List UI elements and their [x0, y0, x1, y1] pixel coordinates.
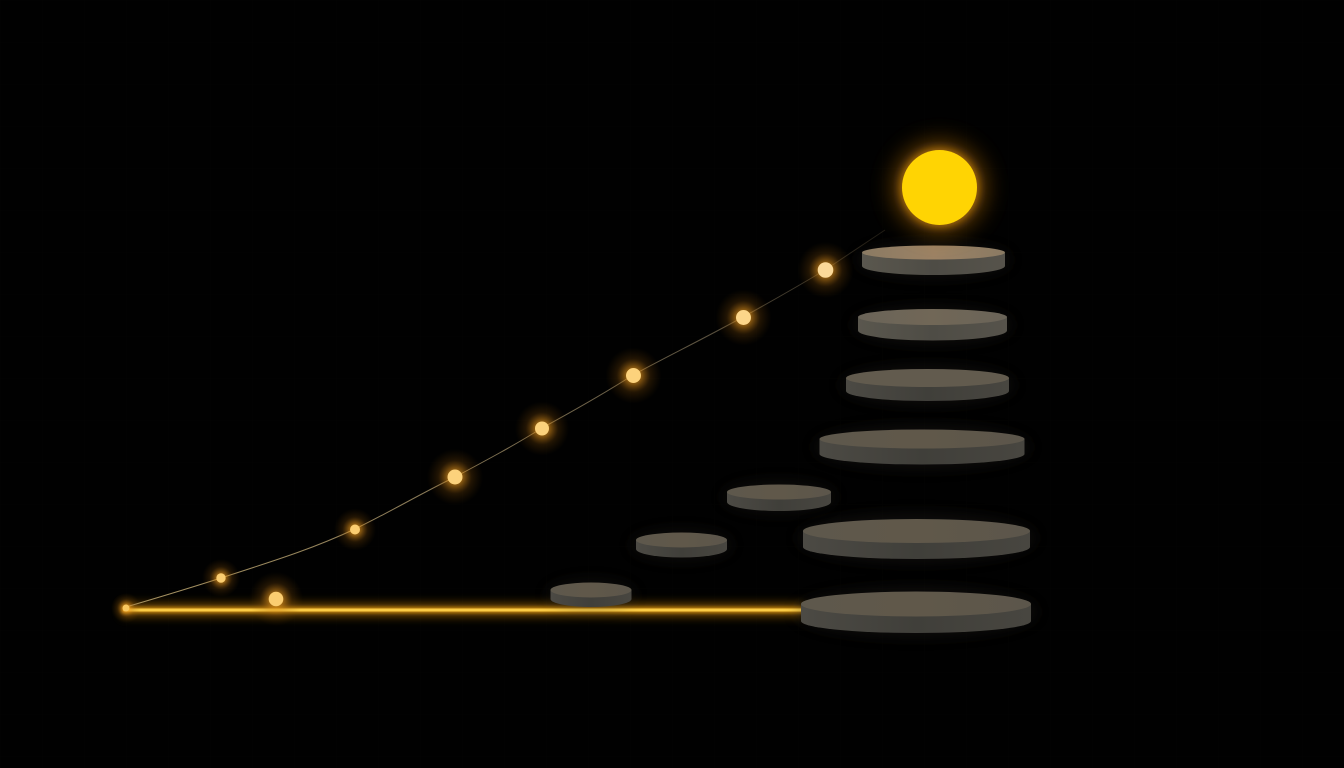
dot: origin	[111, 593, 141, 623]
horizontal baseline	[122, 604, 804, 616]
disc: small 3	[723, 481, 835, 513]
disc: stack 2	[854, 307, 1012, 343]
dot 2	[334, 508, 376, 550]
dot 1	[202, 559, 240, 597]
dot 4	[515, 402, 569, 456]
sun: glowing goal circle	[892, 140, 986, 234]
dot: stray near baseline	[249, 572, 303, 626]
glowing progress dots	[111, 242, 854, 626]
disc: small 1	[547, 580, 635, 610]
disc: stack 4	[815, 426, 1029, 468]
disc: small 2	[632, 530, 732, 560]
dot 5	[606, 348, 662, 404]
disc stack	[796, 243, 1036, 636]
dot 6	[716, 290, 772, 346]
stepping discs	[547, 481, 835, 610]
disc: stack 3	[842, 366, 1014, 404]
dot 7	[798, 242, 854, 298]
disc: stack 6 bottom	[796, 588, 1036, 636]
dot 3	[427, 449, 483, 505]
rising curve	[126, 230, 885, 607]
disc: stack 1 top	[858, 243, 1010, 277]
disc: stack 5	[798, 514, 1034, 562]
